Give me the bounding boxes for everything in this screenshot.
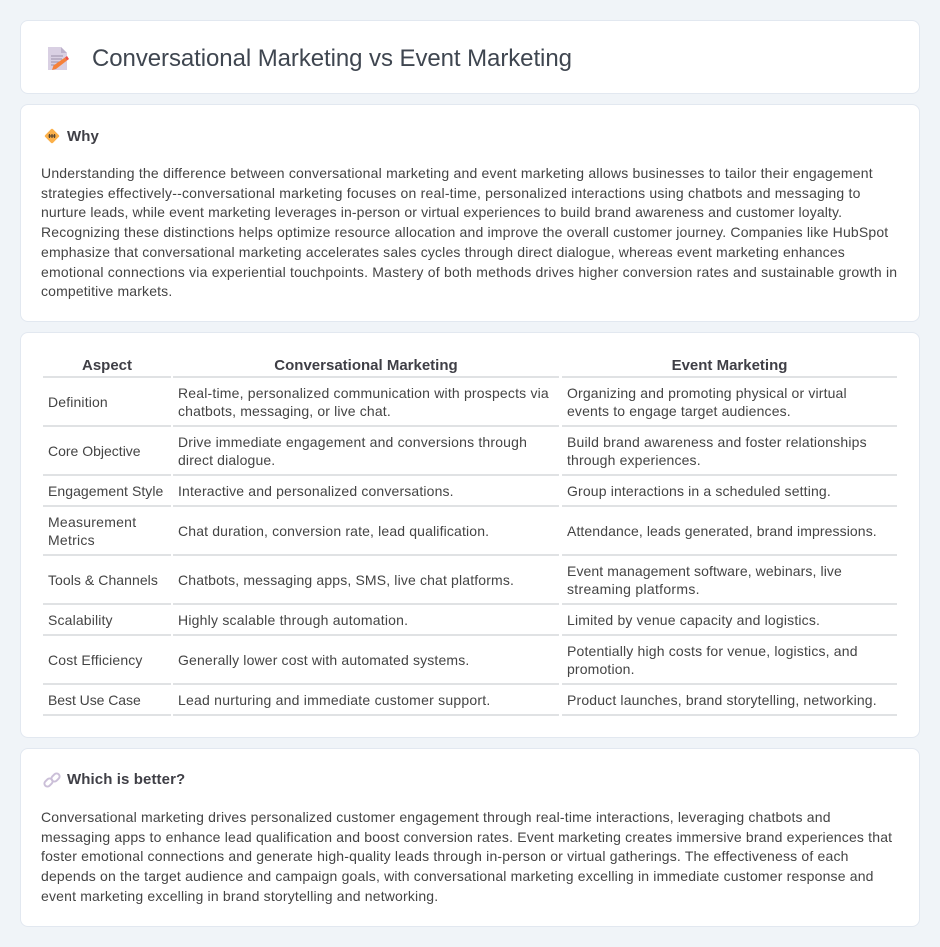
tools and channels: conversational: Chatbots, messaging apps, SMS, live chat platforms. (178, 572, 514, 588)
row: measurement metrics (48, 514, 136, 548)
definition: conversational: Real-time, personalized communication with prospects via (178, 385, 549, 401)
text: why paragraph: emphasize that conversational marketing accelerates sales cycles through direct dialogue, whereas event marketing enhances (41, 244, 845, 260)
cost efficiency: event: promotion. (567, 661, 635, 677)
engagement style: conversational: Interactive and personalized conversations. (178, 483, 454, 499)
heading: why: Why (67, 128, 99, 145)
text: why paragraph: emotional connections via experiential touchpoints. Mastery of both methods drives higher conversion rates and sustainable growth in (41, 264, 897, 280)
scalability: event: Limited by venue capacity and logistics. (567, 612, 820, 628)
definition: event (567, 385, 847, 419)
text: which is better paragraph: depends on the target audience and campaign goals, with conversational marketing excelling in immediate customer response and (41, 868, 874, 884)
definition: event: events to engage target audiences. (567, 403, 791, 419)
panel: why (20, 104, 920, 322)
icon: warning diamond (44, 128, 60, 144)
table: comparison (43, 357, 897, 716)
core objective: conversational: direct dialogue. (178, 452, 275, 468)
definition: conversational (178, 385, 549, 419)
text: why paragraph: Understanding the difference between conversational marketing and event marketing allows businesses to tailor their engagement (41, 165, 873, 181)
panel: comparison table (20, 332, 920, 738)
tools and channels: event: Event management software, webinars, live (567, 563, 842, 579)
heading: which is better: Which is better? (67, 771, 185, 788)
text: why paragraph: competitive markets. (41, 283, 172, 299)
row: cost efficiency: Cost Efficiency (48, 652, 143, 668)
engagement style: event: Group interactions in a scheduled setting. (567, 483, 831, 499)
icon: memo with pencil (48, 47, 69, 70)
row: tools and channels: Tools & Channels (48, 572, 158, 588)
measurement metrics: conversational: Chat duration, conversion rate, lead qualification. (178, 523, 489, 539)
text: which is better paragraph: messaging apps to enhance lead qualification and boost conversion rates. Event marketing creates immersive brand experiences that (41, 829, 892, 845)
text: why paragraph: nurture leads, while event marketing leverages in-person or virtual experiences to build brand awareness and customer loyalty. (41, 204, 842, 220)
row: definition: Definition (48, 394, 108, 410)
core objective: event: Build brand awareness and foster relationships (567, 434, 867, 450)
measurement metrics: event: Attendance, leads generated, brand impressions. (567, 523, 877, 539)
text: which is better paragraph: foster emotional connections and generate high-quality leads through in-person or virtual gatherings. The effectiveness of each (41, 848, 849, 864)
scalability: conversational: Highly scalable through automation. (178, 612, 408, 628)
row: measurement metrics: Metrics (48, 532, 95, 548)
panel: header (20, 20, 920, 94)
panel: which is better (20, 748, 920, 927)
tools and channels: event (567, 563, 842, 597)
text: why paragraph (41, 165, 897, 299)
core objective: event: through experiences. (567, 452, 701, 468)
best use case: conversational: Lead nurturing and immediate customer support. (178, 692, 491, 708)
text: which is better paragraph: Conversational marketing drives personalized customer engagement through real-time interactions, leveraging chatbots and (41, 809, 831, 825)
core objective: conversational (178, 434, 527, 468)
text: why paragraph: Recognizing these distinctions helps optimize resource allocation and improve the overall customer journey. Companies like HubSpot (41, 224, 888, 240)
cost efficiency: conversational: Generally lower cost with automated systems. (178, 652, 469, 668)
table header: event marketing: Event Marketing (672, 357, 787, 374)
icon: link (44, 772, 60, 788)
text: which is better paragraph: event marketing excelling in brand storytelling and networking. (41, 888, 438, 904)
row: core objective: Core Objective (48, 443, 141, 459)
table header: aspect: Aspect (82, 357, 132, 374)
row: measurement metrics: Measurement (48, 514, 136, 530)
text: which is better paragraph (41, 809, 892, 904)
core objective: conversational: Drive immediate engagement and conversions through (178, 434, 527, 450)
row: scalability: Scalability (48, 612, 113, 628)
cost efficiency: event: Potentially high costs for venue, logistics, and (567, 643, 858, 659)
title: Conversational Marketing vs Event Marketing (92, 45, 572, 72)
row: engagement style: Engagement Style (48, 483, 163, 499)
text: why paragraph: strategies effectively--conversational marketing focuses on real-time, personalized interactions using chatbots and messaging to (41, 185, 861, 201)
definition: event: Organizing and promoting physical or virtual (567, 385, 847, 401)
definition: conversational: chatbots, messaging, or live chat. (178, 403, 391, 419)
best use case: event: Product launches, brand storytelling, networking. (567, 692, 877, 708)
tools and channels: event: streaming platforms. (567, 581, 700, 597)
table header: conversational marketing: Conversational Marketing (274, 357, 458, 374)
core objective: event (567, 434, 867, 468)
row: best use case: Best Use Case (48, 692, 141, 708)
cost efficiency: event (567, 643, 858, 677)
